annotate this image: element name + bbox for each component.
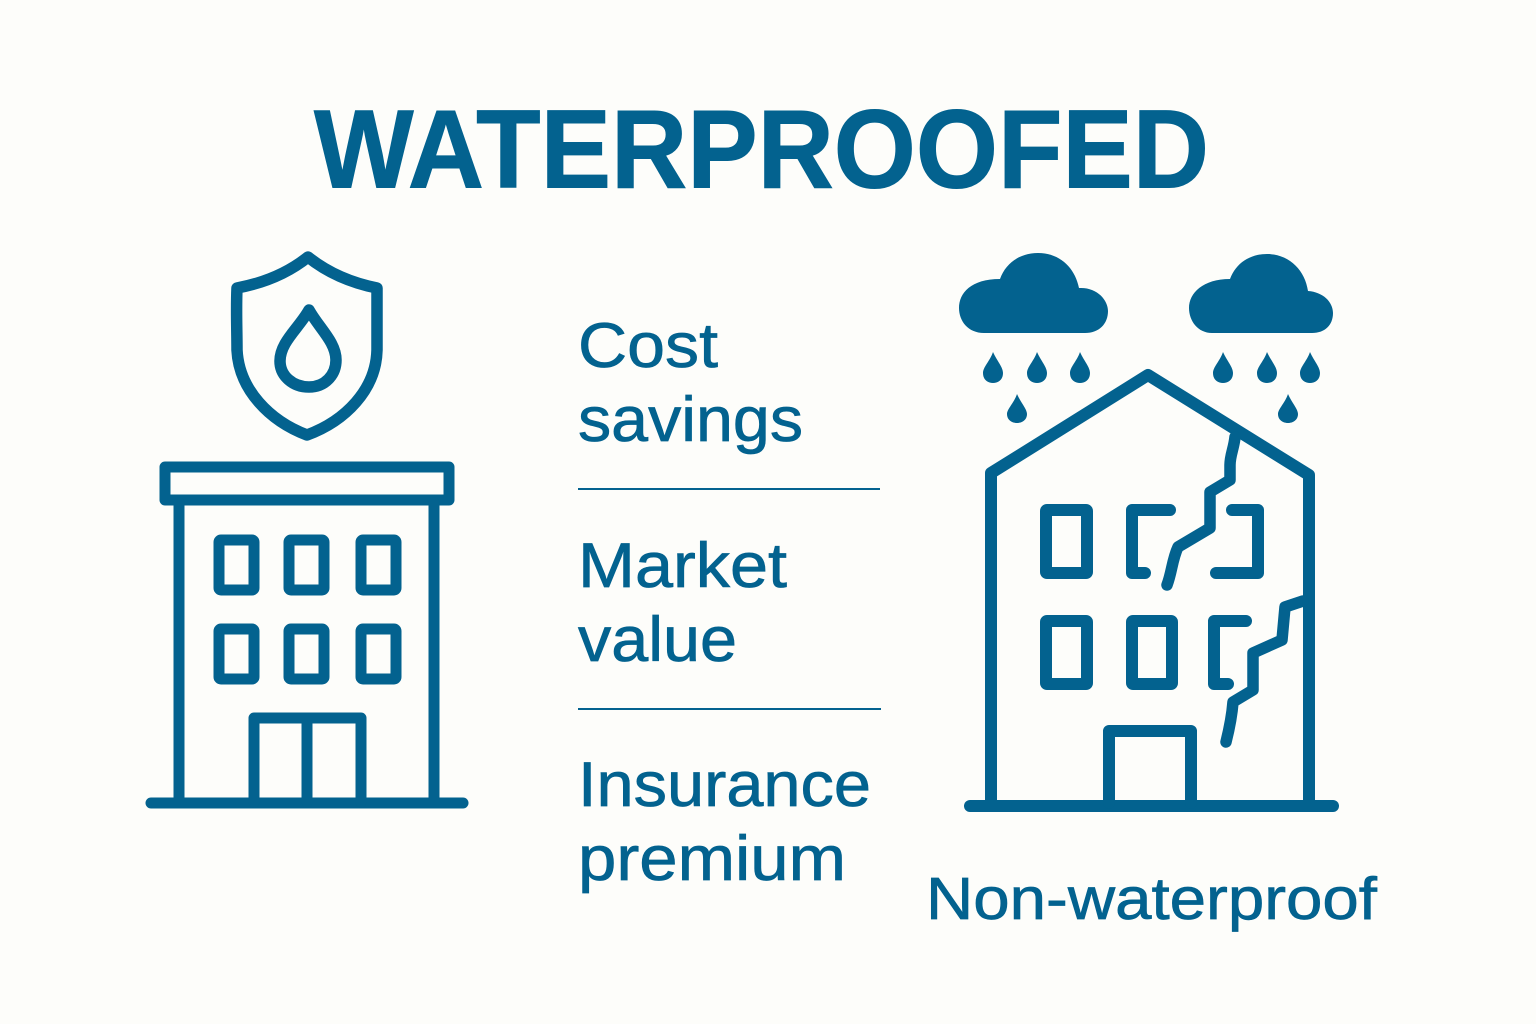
- label: insurance premium: premium: [578, 824, 846, 894]
- icon: shield with water drop: [237, 257, 377, 435]
- title: WATERPROOFED: [314, 88, 1209, 212]
- label: cost savings: savings: [578, 385, 803, 455]
- label: cost savings: Cost: [578, 311, 719, 381]
- label: market value: [578, 531, 788, 675]
- icon: right rain cloud: [1189, 254, 1333, 423]
- windows: [1046, 510, 1258, 684]
- crack: lower: [1226, 601, 1303, 742]
- label: insurance premium: [578, 750, 871, 894]
- label: insurance premium: Insurance: [578, 750, 871, 820]
- panel: waterproofed building: [151, 257, 463, 803]
- house outline: [991, 375, 1309, 803]
- label: non-waterproof: Non-waterproof: [926, 866, 1378, 932]
- label: market value: Market: [578, 531, 788, 601]
- ground line: [970, 800, 1333, 812]
- text: benefits list: [578, 311, 881, 894]
- door: [1109, 731, 1191, 803]
- panel: non-waterproof building: [959, 253, 1333, 806]
- icon: left rain cloud: [959, 253, 1108, 423]
- label: market value: value: [578, 605, 737, 675]
- building walls: [179, 503, 434, 802]
- windows: [219, 540, 396, 679]
- label: cost savings: [578, 311, 803, 455]
- ground line: [151, 798, 463, 808]
- door: [254, 718, 361, 802]
- crack: upper: [1167, 437, 1235, 585]
- building roof: [165, 467, 449, 500]
- divider: [578, 488, 880, 490]
- divider: [578, 708, 881, 710]
